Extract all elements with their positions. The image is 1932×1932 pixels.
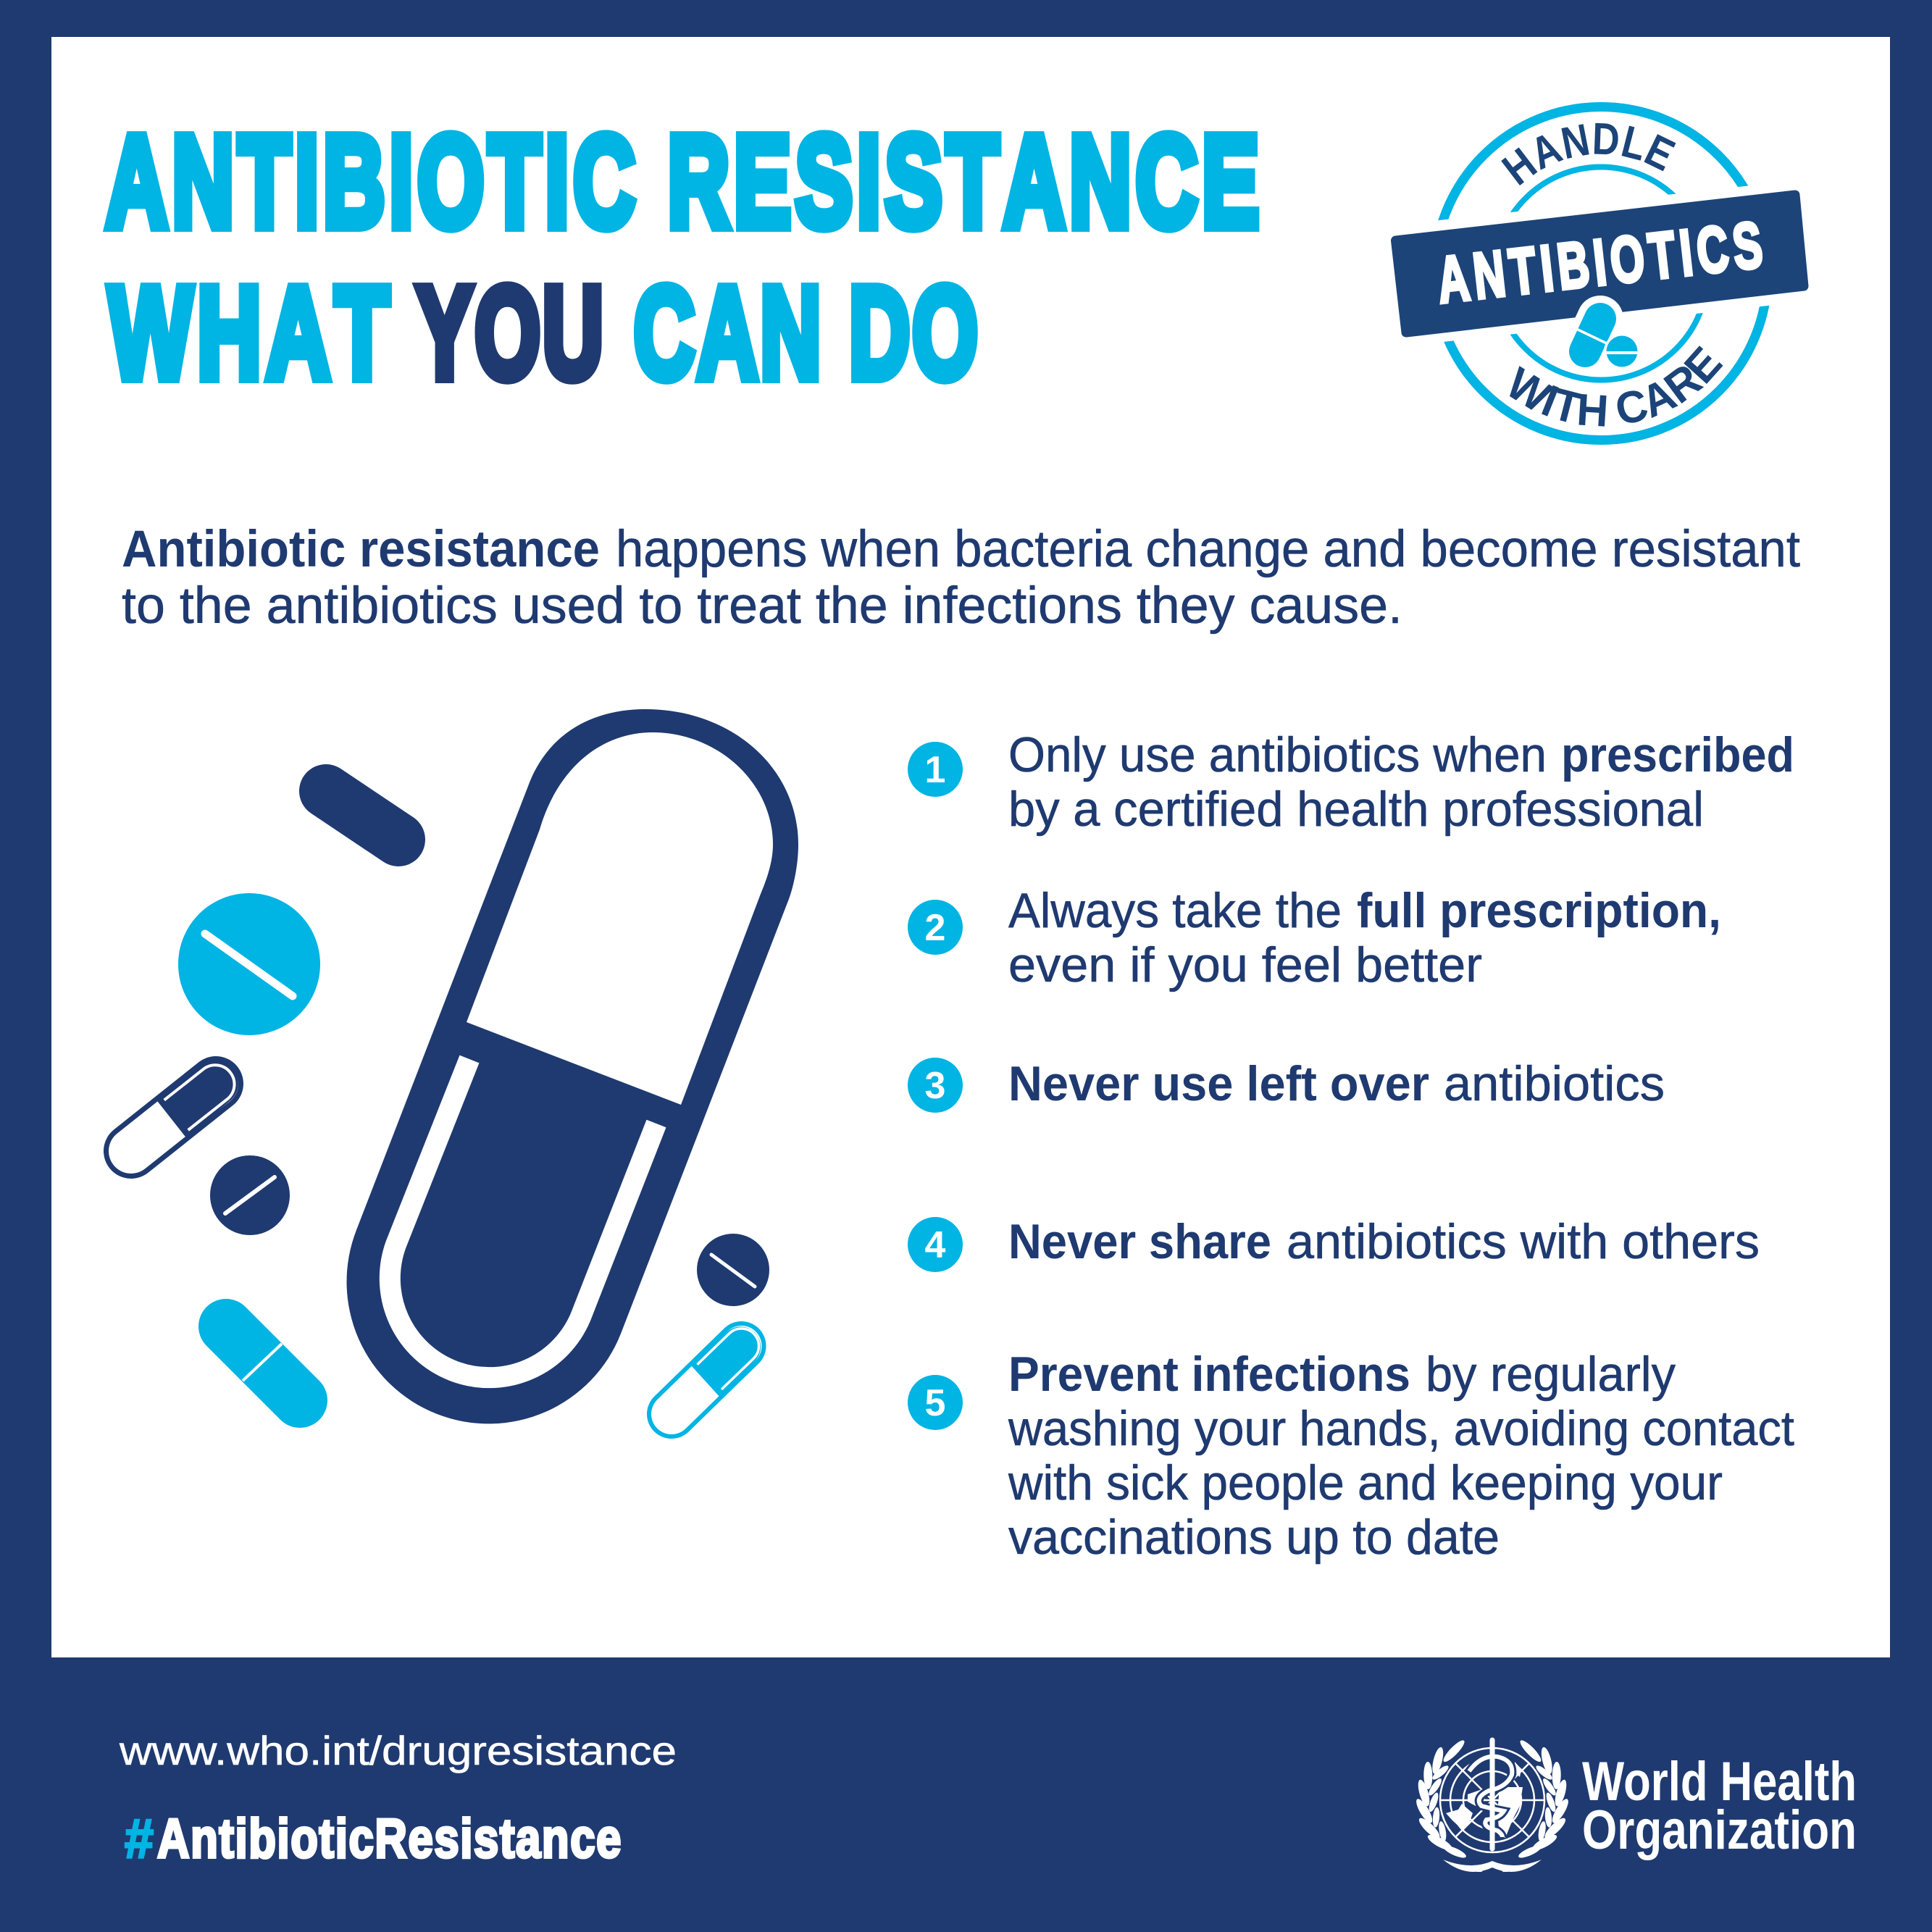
- tip 1: prescribed: [1561, 727, 1794, 782]
- tip 3: [908, 1056, 1665, 1113]
- WHO wordmark: [1582, 1751, 1857, 1861]
- tip 5: vaccinations up to date: [1008, 1510, 1500, 1565]
- title: [106, 109, 1263, 406]
- intro text: happens when bacteria change and become resistant: [616, 521, 1800, 578]
- dark small capsule: [326, 791, 398, 840]
- title: YOU: [417, 261, 606, 406]
- globe grid: [1440, 1748, 1544, 1852]
- tip 3: 3: [925, 1065, 945, 1107]
- footer hashtag: #: [125, 1808, 154, 1870]
- title: WHAT: [109, 261, 394, 406]
- tip 4: Never share: [1008, 1214, 1271, 1269]
- tip 2: Always take the: [1008, 883, 1342, 938]
- tip 1: Only use antibiotics when: [1008, 727, 1547, 782]
- outlined dark capsule: [131, 1061, 238, 1151]
- intro text: to the antibiotics used to treat the infections they cause.: [122, 577, 1402, 635]
- cyan capsule: [226, 1326, 300, 1400]
- WHO emblem: [1413, 1738, 1571, 1872]
- footer hashtag: AntibioticResistance: [157, 1808, 622, 1870]
- outlined cyan capsule: [672, 1326, 761, 1414]
- staff and serpent: [1469, 1740, 1512, 1849]
- tip 5: [908, 1347, 1794, 1565]
- tip 5: by regularly: [1426, 1347, 1676, 1402]
- laurel wreath: [1413, 1738, 1571, 1860]
- tip 4: [908, 1214, 1760, 1272]
- tip 4: 4: [925, 1224, 946, 1266]
- dark scored tablet right: [697, 1234, 769, 1306]
- WHO wordmark: Organization: [1582, 1799, 1857, 1861]
- tip 5: Prevent infections: [1008, 1347, 1410, 1402]
- tip 5: washing your hands, avoiding contact: [1008, 1401, 1794, 1456]
- ribbon: [1443, 1860, 1542, 1872]
- tip 2: even if you feel better: [1008, 937, 1482, 992]
- tip 2: full prescription,: [1357, 883, 1721, 938]
- tip 1: by a certified health professional: [1008, 782, 1704, 837]
- badge: handle antibiotics with care: HANDLE: [1501, 123, 1676, 185]
- badge: handle antibiotics with care: [1391, 102, 1808, 445]
- tip 1: [908, 727, 1794, 837]
- intro text: Antibiotic resistance: [122, 521, 600, 578]
- footer url: www.who.int/drugresistance: [119, 1728, 677, 1773]
- continents: [1446, 1762, 1523, 1838]
- cyan scored tablet: [178, 893, 320, 1035]
- tip 4: antibiotics with others: [1287, 1214, 1760, 1269]
- white content panel: [51, 37, 1890, 1657]
- tip 2: 2: [925, 907, 945, 949]
- WHO wordmark: World Health: [1582, 1751, 1857, 1812]
- tip 5: with sick people and keeping your: [1008, 1455, 1723, 1510]
- title: CAN DO: [634, 261, 980, 406]
- tip 3: antibiotics: [1444, 1056, 1665, 1111]
- badge: handle antibiotics with care: ANTIBIOTICS: [1434, 209, 1770, 317]
- tip 5: 5: [925, 1382, 945, 1424]
- tip 3: Never use left over: [1008, 1056, 1429, 1111]
- tip 1: 1: [925, 749, 945, 791]
- illustration: pills: [131, 709, 798, 1423]
- badge: handle antibiotics with care: WITH CARE: [1510, 346, 1723, 427]
- large capsule: [347, 709, 798, 1423]
- title: ANTIBIOTIC RESISTANCE: [106, 109, 1263, 255]
- tip 2: [908, 883, 1721, 992]
- intro text: [122, 521, 1800, 635]
- dark scored tablet: [210, 1155, 290, 1235]
